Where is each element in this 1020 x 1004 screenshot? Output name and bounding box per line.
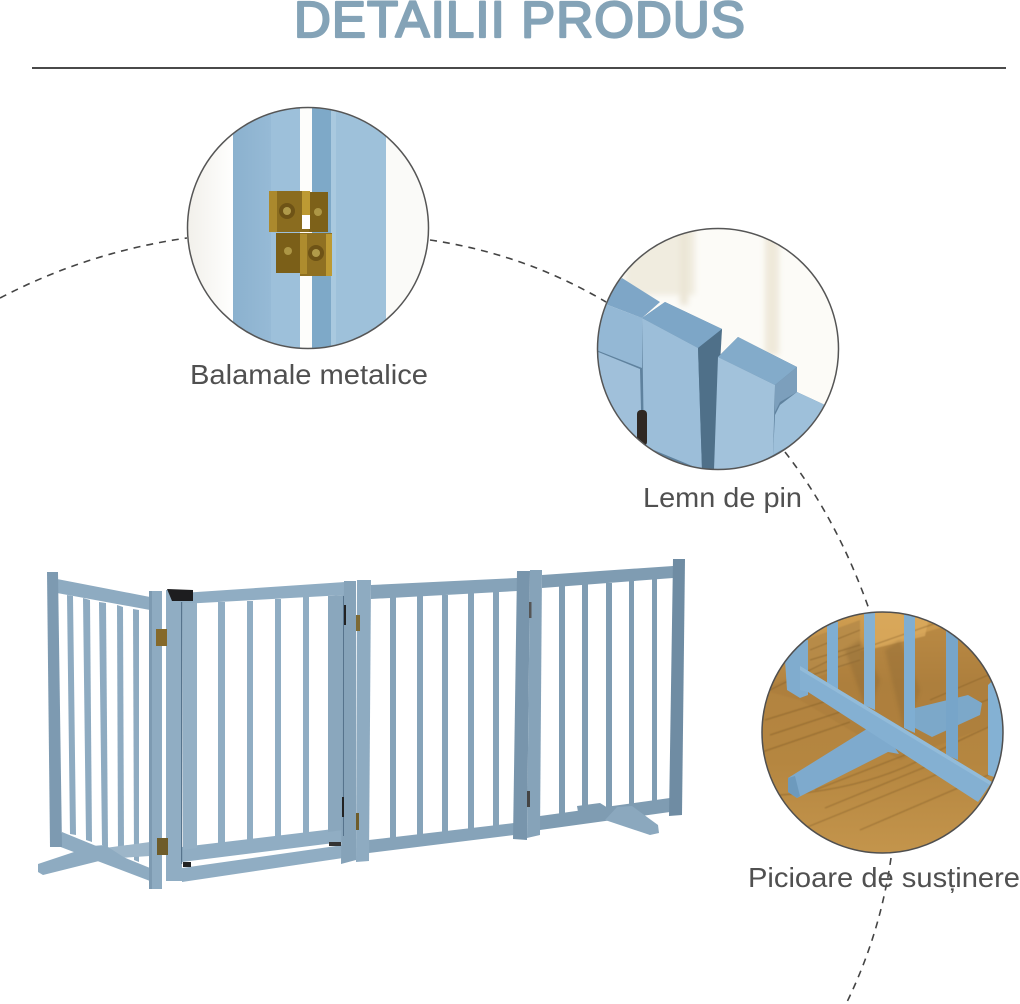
wood floor planks: [762, 612, 1005, 830]
fence panel: gate section: [166, 581, 356, 882]
detail circle: pine wood: [590, 225, 845, 480]
icon: brass hinge: [269, 191, 332, 276]
left post: [785, 640, 808, 698]
back foot: [915, 695, 982, 737]
fence panel: right section: [527, 559, 685, 838]
detail circle: support feet: [760, 610, 1005, 855]
fence panel: folded left section: [38, 572, 162, 889]
bottom rail: [800, 666, 992, 802]
icon: small fence hinges: [156, 602, 532, 867]
icon: gate latch: [167, 589, 193, 601]
front foot: [788, 722, 899, 798]
label: pine wood: Lemn de pin: [643, 482, 802, 513]
title divider: [32, 67, 1006, 69]
label: metal hinges: Balamale metalice: [190, 359, 428, 390]
label: support feet: Picioare de susținere: [748, 862, 1020, 893]
fence product image: [38, 559, 685, 889]
fence panel: middle section: [356, 571, 530, 862]
detail circle: metal hinges: [185, 105, 431, 355]
dashed connector arcs: [0, 238, 891, 1004]
spindles: [827, 622, 838, 690]
